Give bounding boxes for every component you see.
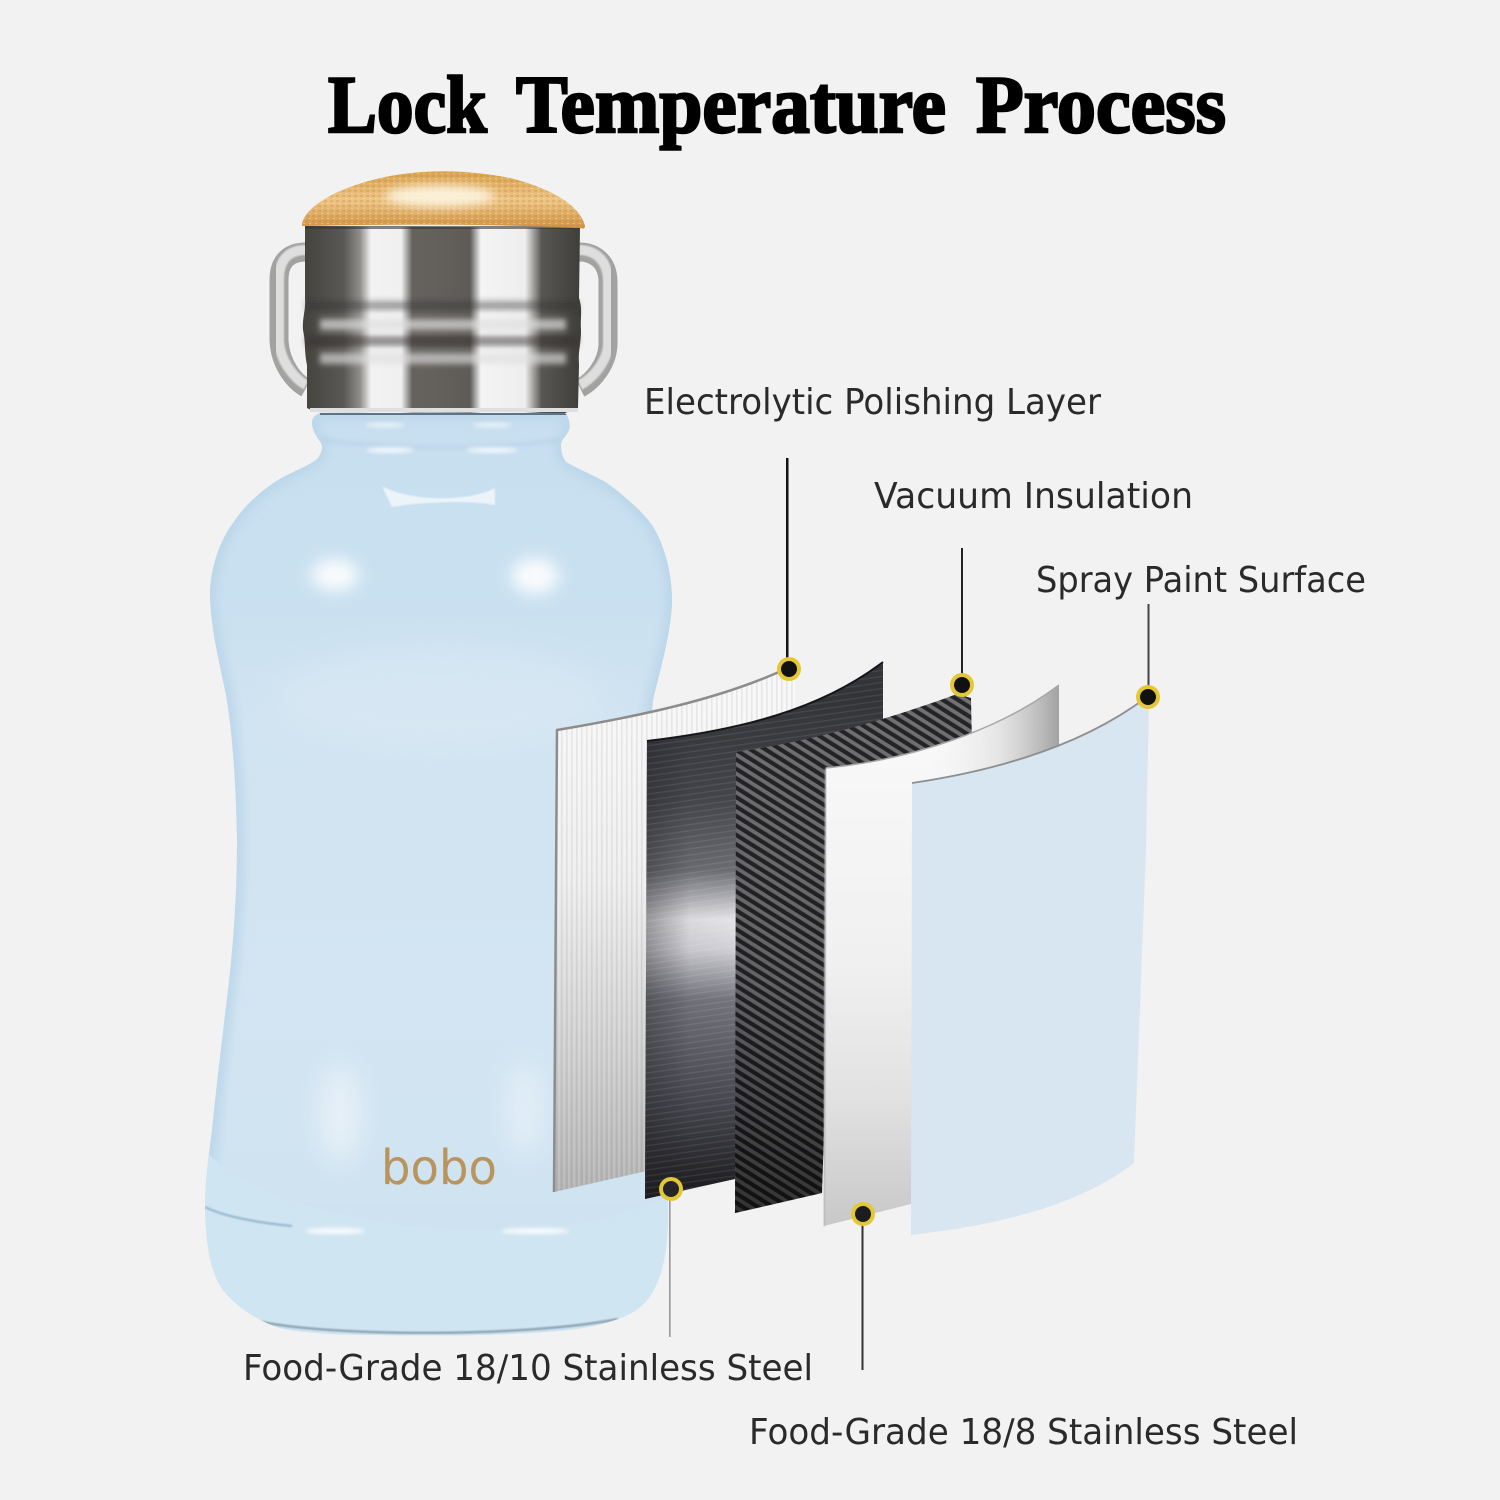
leader line <box>862 1220 864 1370</box>
handle left <box>279 250 306 388</box>
title: Lock <box>328 59 487 150</box>
marker dot <box>950 673 974 697</box>
waist sheen <box>275 648 605 752</box>
marker dot <box>1136 685 1160 709</box>
title <box>328 59 1226 150</box>
layer 2: food-grade 18/10 stainless steel <box>645 662 883 1199</box>
label: Food-Grade 18/10 Stainless Steel <box>243 1348 813 1389</box>
title: Temperature <box>516 59 946 150</box>
shoulder glare <box>382 486 495 507</box>
shoulder and lower highlights <box>311 558 559 1165</box>
label: Electrolytic Polishing Layer <box>644 382 1101 423</box>
marker dot <box>659 1177 683 1201</box>
steel cap <box>303 226 581 413</box>
logo: bobo: bobo <box>381 1140 497 1196</box>
leader line <box>1148 604 1150 694</box>
bottle <box>195 171 685 1345</box>
bamboo lid <box>302 171 585 229</box>
insulation layers <box>554 662 1149 1235</box>
handle right <box>579 250 608 388</box>
label: Spray Paint Surface <box>1036 560 1366 601</box>
neck groove <box>335 440 546 446</box>
callout: food-grade 18/10 stainless steel <box>243 1177 813 1389</box>
cap grooves <box>306 301 578 364</box>
neck and rim highlights <box>305 423 569 1234</box>
layer 4: food-grade 18/8 stainless steel <box>824 685 1059 1226</box>
base band <box>205 1154 668 1336</box>
leader line <box>786 458 788 663</box>
title: Process <box>976 59 1226 150</box>
marker dot <box>777 657 801 681</box>
label: Food-Grade 18/8 Stainless Steel <box>749 1412 1298 1453</box>
layer 5: spray paint surface <box>911 700 1149 1235</box>
edge shading <box>205 413 672 1336</box>
neck top shadow <box>320 413 566 415</box>
leader line <box>669 1195 671 1337</box>
label: Vacuum Insulation <box>874 476 1193 517</box>
bottle body <box>195 405 685 1345</box>
base rim line <box>205 1207 292 1226</box>
layer 3: vacuum insulation <box>735 694 972 1213</box>
callout: food-grade 18/8 stainless steel <box>749 1202 1298 1453</box>
callout: electrolytic polishing layer <box>644 382 1101 681</box>
layer 1: electrolytic polishing <box>554 672 795 1192</box>
marker dot <box>851 1202 875 1226</box>
callout: vacuum insulation <box>874 476 1193 697</box>
leader line <box>961 548 963 680</box>
base shadow edge <box>262 1319 618 1333</box>
callout: spray paint surface <box>1036 560 1366 709</box>
